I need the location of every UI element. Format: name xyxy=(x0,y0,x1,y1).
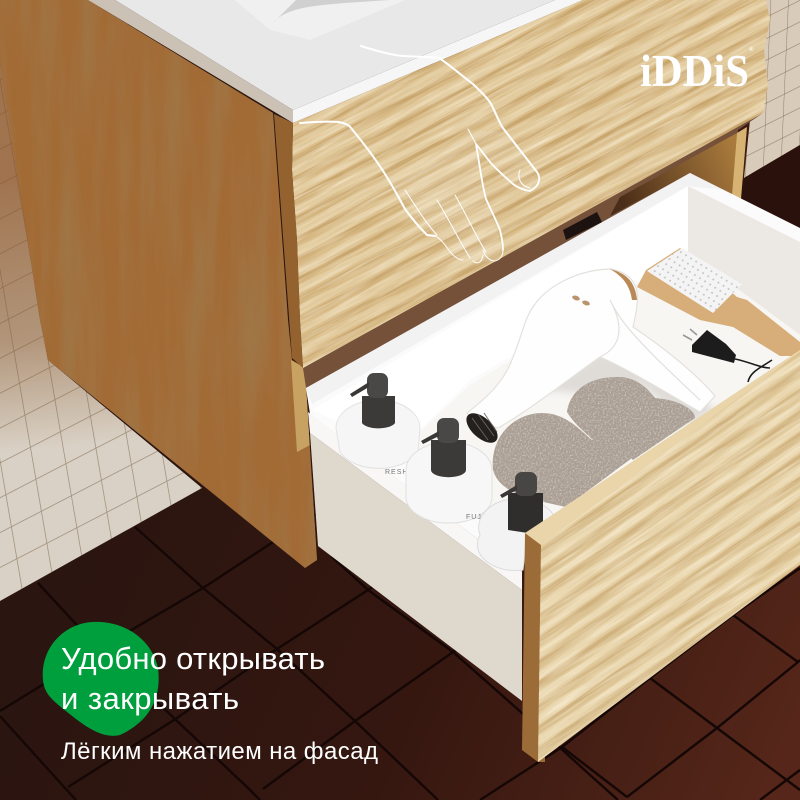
logo iDDiS: iDDiS xyxy=(640,45,749,96)
heading: и закрывать xyxy=(61,681,239,716)
side panel xyxy=(310,433,522,701)
hair dryer xyxy=(461,269,715,448)
upper drawer ribbed edge xyxy=(274,114,303,368)
soap bottle 1: RESH xyxy=(385,469,408,476)
subheading: Лёгким нажатием на фасад xyxy=(61,738,378,765)
upper drawer front ribbed oak xyxy=(292,0,770,368)
hairbrush xyxy=(637,248,800,356)
tile wall left xyxy=(0,63,202,601)
lower drawer top edge xyxy=(525,350,800,545)
cabinet interior cavity xyxy=(303,113,763,388)
logo iDDiS: ® xyxy=(749,46,754,53)
green blob xyxy=(43,622,159,736)
tile wall right xyxy=(744,0,800,178)
lower drawer cut edge xyxy=(522,533,545,762)
long inner wall xyxy=(312,186,688,450)
soap bottle 2: FUJI xyxy=(466,514,485,521)
lower drawer front ribbed oak xyxy=(538,352,800,762)
open drawer xyxy=(306,173,800,701)
floor xyxy=(400,252,800,535)
heading: Удобно открывать xyxy=(61,641,325,676)
rolled towels xyxy=(492,377,695,507)
heading xyxy=(61,641,325,716)
soap bottle 3 xyxy=(477,472,556,571)
soap bottle 1 xyxy=(336,373,420,476)
soap bottle 2 xyxy=(406,418,492,523)
rim xyxy=(306,173,723,404)
dark floor upper right xyxy=(733,145,800,236)
hand illustration xyxy=(300,46,539,263)
right wall xyxy=(688,186,800,335)
cabinet side panel xyxy=(0,0,330,575)
basin top xyxy=(88,0,583,123)
power plug and cord xyxy=(683,329,772,382)
drawer interior xyxy=(306,173,800,572)
